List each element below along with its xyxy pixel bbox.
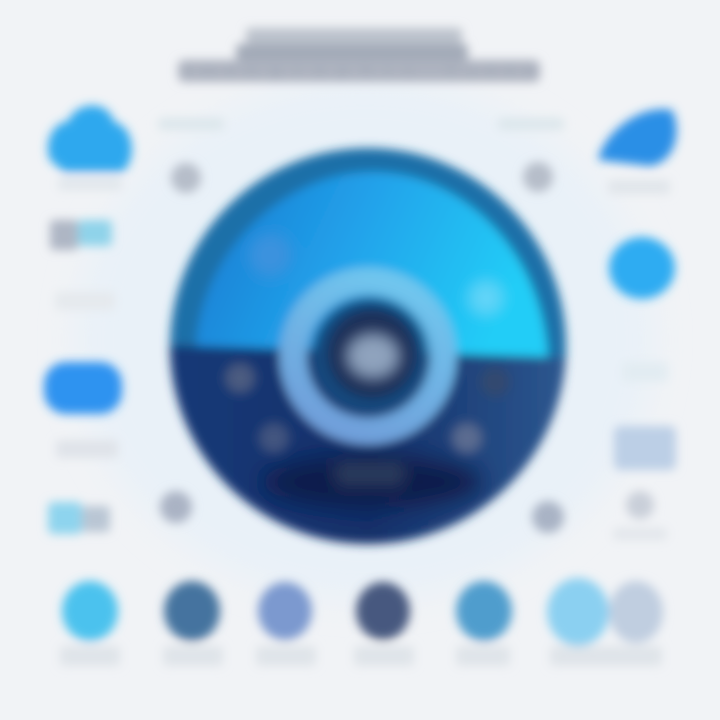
label [622, 362, 668, 382]
label [58, 178, 122, 190]
icon 1 [62, 581, 118, 641]
icon: cloud right [598, 109, 677, 166]
bottom labels [60, 646, 662, 666]
light blue ring [293, 281, 443, 431]
corner dots [160, 162, 564, 533]
left column [44, 105, 132, 534]
highlights on blue band [248, 233, 292, 277]
icon 3 [258, 582, 312, 640]
title [178, 28, 540, 82]
right column [598, 109, 677, 540]
icon: cloud left [48, 105, 132, 172]
bottom icon row [62, 578, 663, 646]
icon: small gray [626, 491, 654, 519]
label [56, 440, 118, 458]
label [613, 528, 667, 540]
icon: blue rounded [609, 237, 675, 299]
label [608, 180, 670, 194]
icon 7 [609, 581, 663, 643]
icon 2 [164, 581, 220, 641]
icon 5 [456, 581, 512, 641]
icon: light mixed [48, 502, 110, 534]
label [55, 292, 115, 310]
center hub [346, 333, 400, 379]
icon: mixed chart [50, 220, 112, 250]
icon 6 [547, 578, 609, 646]
central circular diagram [160, 145, 580, 560]
icon: pale panel [614, 426, 676, 470]
disc body clipped to circle [160, 145, 580, 560]
icon: blue pill [44, 362, 122, 414]
upper blue half [196, 172, 548, 358]
inner dark core [312, 298, 428, 414]
icon 4 [356, 582, 410, 640]
lower navy half [160, 345, 580, 560]
dots on navy band [225, 363, 255, 393]
small faint labels near top [158, 118, 564, 130]
title: Infographic Title [185, 63, 535, 80]
